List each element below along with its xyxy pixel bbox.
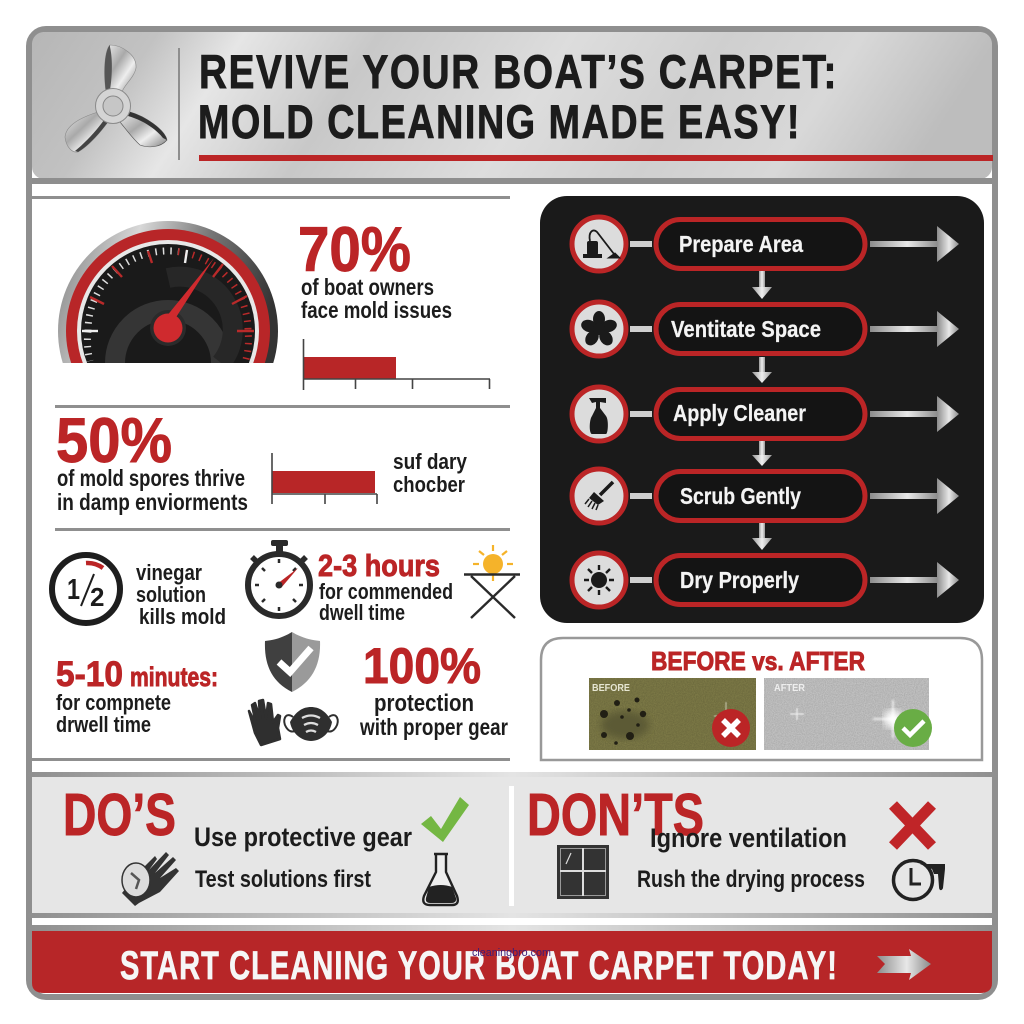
stat: 70% of boat owners: face mold issues <box>301 297 452 323</box>
text: do item 2: Test solutions first <box>195 866 371 893</box>
after image <box>764 678 932 750</box>
text: vinegar solution: kills mold <box>139 604 226 629</box>
icon: metal arrow <box>877 949 931 980</box>
stat: 50% of mold spores: of mold spores thrive <box>57 465 245 491</box>
text: don't item 2: Rush the drying process <box>637 866 865 893</box>
icon: speedometer gauge <box>58 221 278 363</box>
chart label: chocber <box>393 472 465 497</box>
call to action banner <box>26 925 998 993</box>
stat: 5-10 minutes: for compnete <box>56 690 171 715</box>
watermark: cleaningbro.com <box>472 947 551 959</box>
chart label: suf dary <box>393 449 468 474</box>
panel: do's and don'ts <box>26 772 998 918</box>
after image: AFTER <box>774 682 805 694</box>
stat: 5-10 minutes: drwell time <box>56 712 151 737</box>
arrow <box>870 396 959 432</box>
icon: window <box>557 845 609 899</box>
title: MOLD CLEANING MADE EASY! <box>198 95 801 148</box>
stat: 2-3 hours: 2-3 hours <box>318 548 440 583</box>
icon: face mask <box>284 707 338 741</box>
icon: green check badge <box>894 709 932 747</box>
step 3: apply cleaner: Apply Cleaner <box>673 400 806 426</box>
icon: green check <box>421 797 469 842</box>
stat: 70% of boat owners <box>298 215 452 323</box>
icon: vacuum cleaner <box>572 217 626 271</box>
icon: one half dial: 1 <box>67 574 80 606</box>
icon: sun <box>572 553 626 607</box>
step 1: prepare area: Prepare Area <box>679 231 804 257</box>
stat: 100% protection: 100% <box>363 638 481 694</box>
icon: spray bottle <box>572 387 626 441</box>
stat: 70% of boat owners: of boat owners <box>301 274 434 300</box>
title: REVIVE YOUR BOAT’S CARPET: <box>199 45 838 98</box>
icon: glove with cloth <box>122 852 179 906</box>
icon: fan flower <box>572 302 626 356</box>
stat: 5-10 minutes: 5-10 <box>56 655 123 694</box>
step 1: prepare area <box>572 217 959 271</box>
heading: do's: DO’S <box>63 782 176 848</box>
icon: red x badge <box>712 709 750 747</box>
arrow <box>870 562 959 598</box>
stat: 50% of mold spores: in damp enviorments <box>57 489 248 515</box>
header banner <box>32 32 993 184</box>
stat: 100% protection: protection <box>374 690 474 717</box>
icon: one half dial: 2 <box>90 582 104 612</box>
chart label <box>393 449 468 497</box>
arrow down <box>752 357 772 383</box>
bar chart: 70% <box>303 339 490 390</box>
text: vinegar solution: solution <box>136 582 206 607</box>
step 2: ventilate space <box>572 302 959 356</box>
icon: dripping clock <box>894 860 945 900</box>
stat: 100% protection: with proper gear <box>359 714 508 740</box>
text: don't item 1: Ignore ventilation <box>650 823 847 853</box>
panel: before vs after <box>541 638 982 760</box>
heading: BEFORE vs. AFTER <box>651 646 865 676</box>
before image <box>589 678 756 750</box>
arrow down <box>752 271 772 299</box>
panel: process steps <box>540 196 984 623</box>
bar chart: 50% <box>272 449 468 504</box>
stat: 5-10 minutes: minutes: <box>130 662 218 692</box>
icon: sun over drying rack <box>464 545 520 618</box>
icon: glove <box>249 700 280 745</box>
step 5: dry properly <box>572 553 959 607</box>
before image: BEFORE <box>592 682 630 694</box>
icon: propeller <box>65 45 167 152</box>
stat: 50% of mold spores: 50% <box>56 406 172 476</box>
icon: brush <box>572 469 626 523</box>
arrow <box>870 226 959 262</box>
arrow down <box>752 441 772 466</box>
heading: don'ts: DON’TS <box>527 782 704 848</box>
arrow <box>870 478 959 514</box>
stat: 100% protection <box>359 638 508 740</box>
step 5: dry properly: Dry Properly <box>680 567 799 593</box>
step 4: scrub gently: Scrub Gently <box>680 483 801 509</box>
step 3: apply cleaner <box>572 387 959 441</box>
step 4: scrub gently <box>572 469 959 523</box>
title <box>198 45 838 148</box>
icon: flask <box>423 854 458 905</box>
icon: stopwatch <box>248 540 310 616</box>
icon: red x <box>893 805 932 846</box>
step 2: ventilate space: Ventitate Space <box>671 316 821 342</box>
stat: 2-3 hours <box>318 548 453 625</box>
arrow down <box>752 523 772 550</box>
text: vinegar solution: vinegar <box>136 560 202 585</box>
arrow <box>870 311 959 347</box>
text: vinegar solution <box>136 560 226 629</box>
stat: 70% of boat owners: 70% <box>298 215 411 285</box>
stat: 5-10 minutes <box>56 655 218 737</box>
text: do item 1: Use protective gear <box>194 822 412 852</box>
icon: shield with check <box>265 632 320 692</box>
stat: 2-3 hours: dwell time <box>319 600 405 625</box>
stat: 50% of mold spores <box>56 406 248 515</box>
stat: 2-3 hours: for commended <box>319 579 453 604</box>
icon: one half dial <box>52 555 120 623</box>
